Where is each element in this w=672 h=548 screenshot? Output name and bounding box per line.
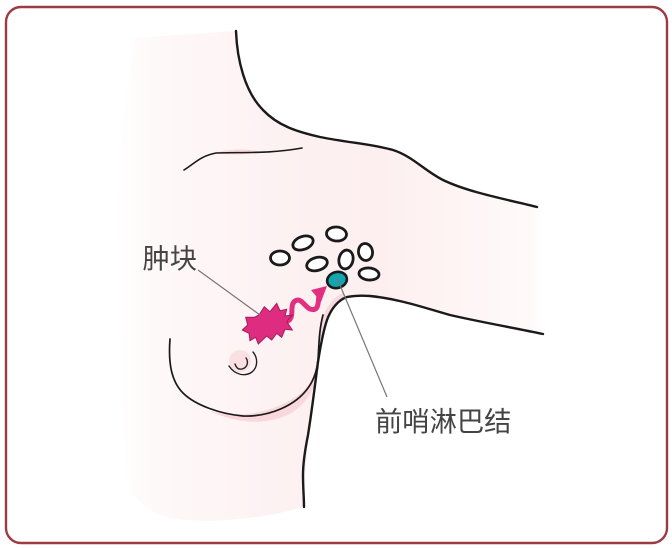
breast outline [170, 315, 323, 416]
underarm and torso outline [303, 296, 543, 507]
shoulder outline [236, 31, 537, 207]
sentinel lymph node [325, 270, 349, 290]
tumour [242, 303, 292, 344]
armpit shadow [318, 293, 347, 340]
wavy arrow [288, 286, 327, 321]
lymph nodes [270, 226, 379, 281]
breast fold shadow [210, 362, 318, 422]
skin area [120, 31, 545, 521]
nipple [229, 350, 257, 375]
upper crease shadow [215, 150, 262, 154]
label: sentinel lymph node: 前哨淋巴结 [375, 406, 511, 437]
tumour leader line [198, 270, 260, 315]
collarbone crease [184, 148, 302, 170]
sentinel node leader line [337, 278, 387, 397]
label: tumour: 肿块 [142, 243, 197, 274]
